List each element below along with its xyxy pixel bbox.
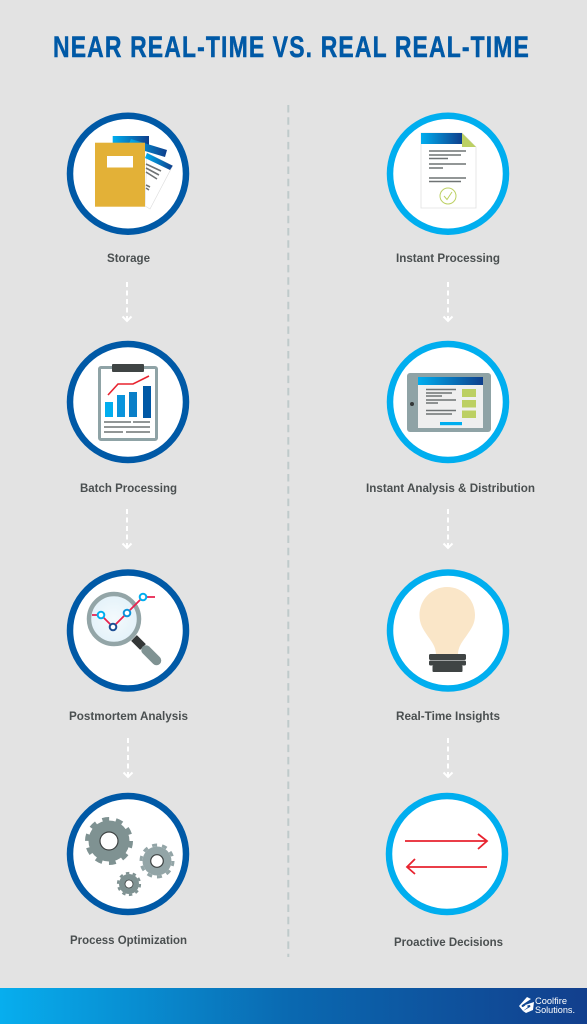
label: instant analysis and distribution: Instant Analysis & Distribution (366, 481, 535, 495)
icon: clipboard chart (70, 344, 186, 460)
label: postmortem analysis: Postmortem Analysis (69, 709, 188, 723)
logo: Coolfire Solutions: Coolfire (535, 996, 567, 1007)
logo: Coolfire Solutions: Solutions. (535, 1005, 575, 1016)
arrow 1 left (122, 282, 132, 321)
label: instant processing: Instant Processing (396, 251, 500, 265)
label: batch processing: Batch Processing (80, 481, 177, 495)
icon: magnifier analysis (70, 572, 186, 688)
logo: Coolfire Solutions (519, 996, 575, 1016)
arrow 2 left (122, 509, 132, 548)
icon: gears (70, 796, 186, 912)
arrow 2 right (444, 509, 452, 548)
arrow 1 right (444, 282, 452, 321)
label: real-time insights: Real-Time Insights (396, 709, 500, 723)
icon: tablet (390, 344, 506, 460)
footer band (0, 988, 587, 1024)
icon: opposing arrows (389, 796, 505, 912)
arrow 3 left (124, 738, 132, 777)
center divider (287, 105, 289, 957)
icon: storage folder (70, 116, 186, 232)
label: process optimization: Process Optimization (70, 933, 187, 947)
label: storage: Storage (107, 251, 150, 265)
arrow 3 right (444, 738, 452, 777)
label: proactive decisions: Proactive Decisions (394, 935, 503, 949)
icon: document check (390, 116, 506, 232)
icon: light bulb (390, 572, 506, 688)
